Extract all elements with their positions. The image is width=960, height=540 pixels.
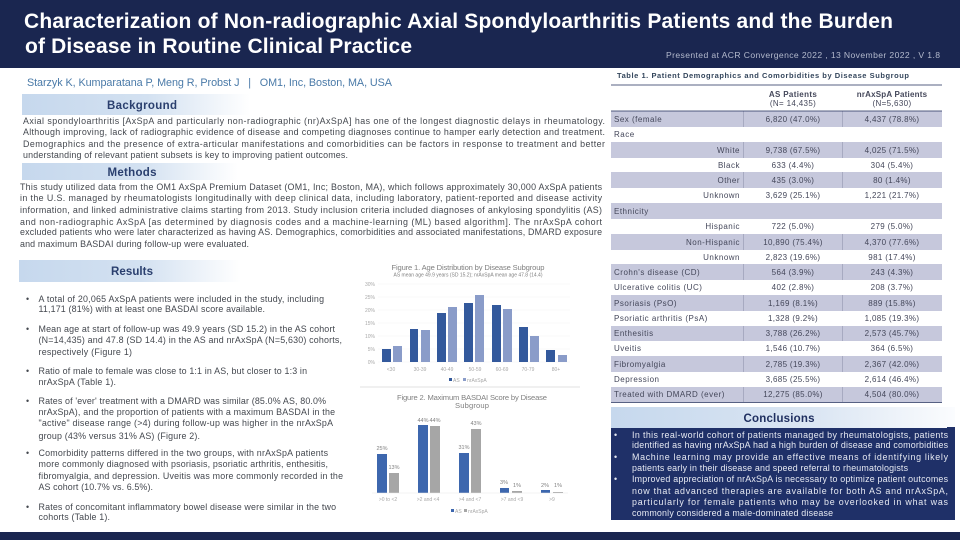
results bullet list: •: [26, 324, 29, 334]
table row labels: Race: [614, 130, 635, 139]
conclusions box: •: [614, 452, 617, 462]
table nrAxSpA values: 2,614 (46.4%): [865, 375, 919, 384]
table row labels: [614, 115, 740, 399]
table nrAxSpA values: 304 (5.4%): [871, 161, 913, 170]
results bullet list: 11,171 (81%) with at least one BASDAI score available.: [38, 304, 265, 314]
table row labels: Fibromyalgia: [614, 360, 666, 369]
results bullet list: fibromyalgia, and depression. Uveitis was more commonly recorded in the: [38, 471, 343, 481]
chart: figure 2 maximum BASDAI: 1%: [554, 483, 562, 489]
methods text: This study utilized data from the OM1 AxSpA Premium Dataset (OM1, Inc; Boston, MA), which follows approximately 30,000 AxSpA patients: [20, 182, 603, 192]
chart: figure 2 maximum BASDAI: >7 and <9: [501, 497, 523, 503]
title: Characterization of Non-radiographic Axial Spondyloarthritis Patients and the Burden: [24, 10, 893, 33]
results bullet list: nrAxSpA (Table 1).: [38, 377, 116, 387]
table AS values: 6,820 (47.0%): [766, 115, 820, 124]
results bullet list: Rates of concomitant inflammatory bowel disease were similar in the two: [38, 502, 336, 512]
table nrAxSpA values: 4,370 (77.6%): [865, 238, 919, 247]
background text: understanding of relevant patient subsets is key to improving patient outcomes.: [23, 150, 348, 160]
results bullet list: respectively (Figure 1): [38, 347, 132, 357]
table column headers: (N=5,630): [873, 99, 911, 108]
chart: figure 1 age distribution: 15%: [365, 321, 376, 327]
table AS values: 10,890 (75.4%): [763, 238, 823, 247]
results bullet list: [26, 294, 343, 522]
chart: figure 2 maximum BASDAI: 13%: [388, 465, 400, 471]
background text: Although improving, lack of radiographic evidence of disease and competing diagnoses continue to hamper early detection and treatment.: [23, 127, 605, 137]
chart: figure 1 age distribution: <30: [387, 367, 395, 373]
conclusions box: In this real-world cohort of patients managed by rheumatologists, patients: [632, 430, 949, 440]
table AS values: 3,685 (25.5%): [766, 375, 820, 384]
heading: background: Background: [107, 100, 177, 112]
table row labels: Ethnicity: [614, 207, 649, 216]
heading: results: Results: [111, 266, 153, 278]
table shaded rows: [611, 111, 942, 402]
chart: figure 2 maximum BASDAI: >0 to <2: [379, 497, 397, 503]
title: of Disease in Routine Clinical Practice: [25, 35, 412, 58]
results bullet list: Mean age at start of follow-up was 49.9 years (SD 15.2) in the AS cohort: [38, 324, 336, 334]
results bullet list: AS cohort (10.7% vs. 6.5%).: [38, 482, 153, 492]
chart: figure 2 maximum BASDAI: 31%: [458, 445, 470, 451]
results bullet list: group (43% versus 31% AS) (Figure 2).: [38, 431, 200, 441]
chart: figure 1 age distribution: 10%: [365, 334, 376, 340]
table nrAxSpA values: 2,367 (42.0%): [865, 360, 919, 369]
table row labels: Enthesitis: [614, 329, 654, 338]
table column headers: [769, 90, 928, 108]
header banner: [0, 0, 960, 68]
chart: figure 2 maximum BASDAI: 2%: [541, 483, 549, 489]
table title: Table 1. Patient Demographics and Comorbidities by Disease Subgroup: [617, 71, 909, 80]
chart: figure 1 age distribution: 25%: [365, 295, 376, 301]
table AS values: 435 (3.0%): [772, 176, 814, 185]
conclusions box: patients early in their disease and speed referral to rheumatologists: [632, 463, 909, 473]
results bullet list: cohorts (Table 1).: [38, 512, 110, 522]
table row labels: Other: [717, 176, 740, 185]
table row labels: Psoriatic arthritis (PsA): [614, 314, 708, 323]
chart: figure 2 maximum BASDAI: 43%: [470, 421, 482, 427]
results bullet list: •: [26, 294, 29, 304]
table nrAxSpA values: 4,437 (78.8%): [865, 115, 919, 124]
conclusions box: Machine learning may provide an effective means of identifying likely: [632, 452, 949, 462]
chart: figure 1 age distribution: AS: [453, 378, 460, 384]
chart: figure 2 maximum BASDAI: >9: [549, 497, 555, 503]
table column headers: nrAxSpA Patients: [857, 90, 928, 99]
footer bar: [0, 532, 960, 540]
table nrAxSpA values: 2,573 (45.7%): [865, 329, 919, 338]
conclusions box: •: [614, 430, 617, 440]
table nrAxSpA values: 80 (1.4%): [873, 176, 911, 185]
chart: figure 2 maximum BASDAI: 1%: [513, 483, 521, 489]
table row labels: Depression: [614, 375, 659, 384]
table AS values: 1,169 (8.1%): [768, 299, 818, 308]
panel: results: [19, 260, 343, 522]
conclusions box: now that advanced therapies are available for both AS and nrAxSpA,: [632, 486, 948, 496]
methods text: [20, 182, 603, 249]
table AS values: 12,275 (85.0%): [763, 390, 823, 399]
results bullet list: Ratio of male to female was close to 1:1 in AS, but closer to 1:3 in: [38, 366, 307, 376]
chart: figure 2 maximum BASDAI: [372, 393, 568, 515]
table nrAxSpA values: 981 (17.4%): [868, 253, 916, 262]
panel: methods: [20, 163, 603, 249]
results bullet list: more commonly diagnosed with psoriasis, psoriatic arthritis, enthesitis,: [38, 459, 328, 469]
methods text: in the U.S. managed by rheumatologists longitudinally with deep clinical data, including laboratory, patient-reported and disease activity: [20, 193, 603, 203]
table row labels: Uveitis: [614, 344, 642, 353]
results bullet list: Comorbidity patterns differed in the two groups, with nrAxSpA patients: [38, 448, 329, 458]
table row labels: Psoriasis (PsO): [614, 299, 677, 308]
table column headers: AS Patients: [769, 90, 817, 99]
table 1 panel: [611, 71, 942, 402]
table nrAxSpA values: 208 (3.7%): [871, 283, 913, 292]
conclusions box: Improved appreciation of nrAxSpA is necessary to optimize patient outcomes: [632, 474, 949, 484]
table AS values: 633 (4.4%): [772, 161, 814, 170]
results bullet list: "active" disease range (>4) during follow-up was higher in the nrAxSpA: [38, 418, 333, 428]
table AS values: 9,738 (67.5%): [766, 146, 820, 155]
heading: methods: Methods: [108, 167, 156, 179]
chart: figure 1 age distribution: 5%: [368, 347, 376, 353]
table AS values: 402 (2.8%): [772, 283, 814, 292]
chart: figure 2 maximum BASDAI: 3%: [500, 480, 508, 486]
table row labels: Crohn's disease (CD): [614, 268, 700, 277]
table nrAxSpA values: 243 (4.3%): [871, 268, 913, 277]
table AS values: 2,823 (19.6%): [766, 253, 820, 262]
table row labels: Sex (female: [614, 115, 662, 124]
chart: figure 1 age distribution: [365, 263, 570, 384]
chart: figure 1 age distribution: 30%: [365, 282, 376, 288]
chart: figure 2 maximum BASDAI: 44%: [429, 418, 441, 424]
results bullet list: (N=14,435) and 47.8 (SD 14.4) in the AS and nrAxSpA (N=5,630) cohorts,: [38, 335, 342, 345]
table nrAxSpA values: 889 (15.8%): [868, 299, 916, 308]
table AS values: 564 (3.9%): [772, 268, 814, 277]
chart: figure 1 age distribution: 20%: [365, 308, 376, 314]
table nrAxSpA values: 364 (6.5%): [871, 344, 913, 353]
chart: figure 2 maximum BASDAI: 25%: [376, 446, 388, 452]
conclusions box: particularly for female patients who may be overlooked in what was: [632, 497, 949, 507]
results bullet list: •: [26, 448, 29, 458]
chart: figure 1 age distribution: 80+: [552, 367, 560, 373]
table row labels: Black: [718, 161, 740, 170]
conclusions box: [611, 427, 955, 520]
chart: figure 1 age distribution: 60-69: [496, 367, 509, 373]
results bullet list: nrAxSpA), and the proportion of patients with a maximum BASDAI in the: [38, 407, 335, 417]
table row labels: Hispanic: [705, 222, 740, 231]
table AS values: 1,328 (9.2%): [768, 314, 818, 323]
table nrAxSpA values: 4,504 (80.0%): [865, 390, 919, 399]
methods text: and maximum BASDAI during follow-up were evaluated.: [20, 239, 249, 249]
chart: figure 2 maximum BASDAI: Subgroup: [455, 401, 489, 410]
table nrAxSpA values: [865, 115, 919, 399]
methods text: excluded patients who were later characterized as having AS. Demographics, comorbidities and associated manifestations, DMARD exposure: [20, 227, 602, 237]
panel: background: [22, 94, 605, 160]
table nrAxSpA values: 279 (5.0%): [871, 222, 913, 231]
chart: figure 1 age distribution: 0%: [368, 360, 376, 366]
chart: figure 1 age distribution: nrAxSpA: [467, 378, 487, 384]
results bullet list: A total of 20,065 AxSpA patients were included in the study, including: [38, 294, 324, 304]
chart: figure 2 maximum BASDAI: >4 and <7: [459, 497, 481, 503]
table row labels: Unknown: [703, 253, 740, 262]
table AS values: 3,788 (26.2%): [766, 329, 820, 338]
heading: conclusions: Conclusions: [744, 413, 814, 425]
chart: figure 2 maximum BASDAI: Figure 2. Maximum BASDAI Score by Disease: [397, 393, 547, 402]
chart: figure 1 age distribution: 70-79: [522, 367, 535, 373]
chart: figure 1 age distribution: 30-39: [414, 367, 427, 373]
table row labels: Ulcerative colitis (UC): [614, 283, 702, 292]
background text: Axial spondyloarthritis [AxSpA and particularly non-radiographic (nr)AxSpA] has one of the longest diagnostic delays in rheumatology.: [23, 116, 605, 126]
background text: [23, 116, 605, 160]
authors and affiliation: Starzyk K, Kumparatana P, Meng R, Probst J | OM1, Inc, Boston, MA, USA: [27, 77, 393, 89]
results bullet list: •: [26, 396, 29, 406]
results bullet list: Rates of 'ever' treatment with a DMARD was similar (85.0% AS, 80.0%: [38, 396, 326, 406]
chart: figure 2 maximum BASDAI: AS: [455, 509, 462, 515]
chart: figure 2 maximum BASDAI: nrAxSpA: [468, 509, 488, 515]
conclusions box: commonly considered a male-dominated disease: [632, 508, 833, 518]
table AS values: 722 (5.0%): [772, 222, 814, 231]
conclusions box: identified as having nrAxSpA had a high burden of disease and comorbidities: [632, 440, 949, 450]
panel: conclusions: [611, 407, 955, 520]
methods text: information, and linked administrative claims starting from 2013. Study inclusion criteria included diagnoses of ankylosing spondylitis (AS): [20, 205, 602, 215]
background text: Demographics and the presence of extra-articular manifestations and comorbidities can be factors in response to treatment and better: [23, 139, 605, 149]
chart: figure 2 maximum BASDAI: 44%: [417, 418, 429, 424]
table column headers: (N= 14,435): [770, 99, 816, 108]
conference note: Presented at ACR Convergence 2022 , 13 November 2022 , V 1.8: [666, 50, 940, 60]
table nrAxSpA values: 4,025 (71.5%): [865, 146, 919, 155]
results bullet list: •: [26, 502, 29, 512]
chart: figure 1 age distribution: 40-49: [441, 367, 454, 373]
chart: figure 1 age distribution: Figure 1. Age Distribution by Disease Subgroup: [392, 263, 544, 272]
table nrAxSpA values: 1,221 (21.7%): [865, 191, 919, 200]
table row labels: Unknown: [703, 191, 740, 200]
chart: figure 2 maximum BASDAI: >2 and <4: [417, 497, 439, 503]
chart: figure 1 age distribution: 50-59: [469, 367, 482, 373]
table row labels: Non-Hispanic: [686, 238, 740, 247]
results bullet list: •: [26, 366, 29, 376]
table nrAxSpA values: 1,085 (19.3%): [865, 314, 919, 323]
table AS values: [763, 115, 823, 399]
table AS values: 1,546 (10.7%): [766, 344, 820, 353]
table AS values: 3,629 (25.1%): [766, 191, 820, 200]
title: [24, 10, 893, 58]
table row labels: Treated with DMARD (ever): [614, 390, 725, 399]
conclusions box: •: [614, 474, 617, 484]
table AS values: 2,785 (19.3%): [766, 360, 820, 369]
chart: figure 1 age distribution: AS mean age 49.9 years (SD 15.2); nrAxSpA mean age 47.8 (14.4): [394, 272, 543, 278]
table row labels: White: [717, 146, 740, 155]
methods text: and non-radiographic AxSpA [as determined by diagnosis codes and a machine-learning (ML) based algorithm]. The nrAxSpA cohort: [20, 217, 603, 227]
